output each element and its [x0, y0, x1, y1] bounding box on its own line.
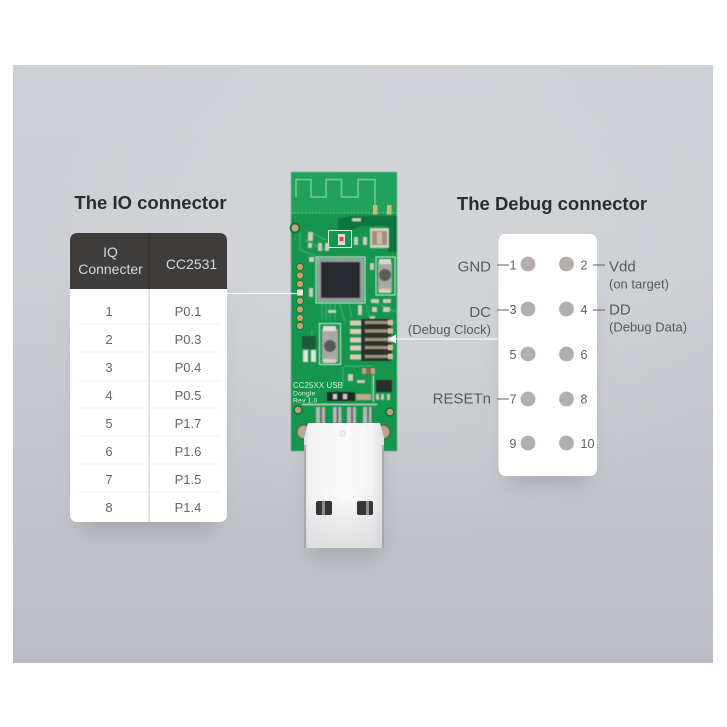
PCB silkscreen label: CC25XX USB: [293, 381, 343, 390]
table rows: P0.5: [175, 388, 201, 403]
pin labels: DD: [609, 302, 631, 318]
pin labels: [408, 258, 687, 408]
pin numbers: 2: [581, 258, 588, 272]
background panel: [13, 65, 713, 663]
arrow: table to IO pad: [227, 292, 298, 294]
small components: [308, 218, 391, 383]
pin labels: DC: [469, 304, 491, 321]
pin numbers: 1: [510, 258, 517, 272]
regulator chip: [373, 375, 392, 402]
pin labels: RESETn: [433, 390, 491, 408]
heading: The IO connector: The IO connector: [74, 192, 227, 213]
bottom push button S2: [320, 324, 340, 364]
table rows: 1: [105, 304, 113, 319]
table rows: P1.7: [175, 416, 201, 431]
pin labels: (Debug Data): [609, 320, 687, 334]
pin numbers: 3: [510, 303, 517, 317]
table header labels: IQ: [103, 244, 118, 260]
PCB antenna trace: [296, 180, 375, 206]
pin labels: GND: [458, 258, 491, 276]
table rows: 6: [105, 444, 113, 459]
crystal: [370, 228, 389, 248]
pin numbers: 10: [581, 437, 594, 451]
arrow: debug panel to header: [388, 334, 498, 344]
table rows: P1.4: [175, 500, 201, 515]
pin dots: [521, 257, 574, 450]
PCB silkscreen label: Rev 1.0: [293, 398, 318, 404]
CC2531 USB dongle: [290, 172, 397, 548]
pin numbers: 7: [510, 392, 517, 406]
pin labels: (Debug Clock): [408, 322, 491, 337]
table rows: 7: [105, 472, 113, 487]
pin leader lines: [497, 265, 605, 399]
lower mounting holes: [294, 406, 394, 416]
table rows: 2: [105, 332, 113, 347]
table header labels: Connecter: [78, 261, 143, 277]
debug header pins: [350, 319, 393, 361]
pin numbers: 5: [510, 348, 517, 362]
lower-left LEDs: [302, 336, 316, 362]
IO connector pads: [296, 264, 304, 330]
USB shell flanges: [297, 425, 390, 439]
heading: The Debug connector: The Debug connector: [457, 193, 647, 214]
table rows: P1.5: [175, 472, 201, 487]
table rows: P1.6: [175, 444, 201, 459]
PCB silkscreen label: [293, 381, 343, 404]
pin numbers: 6: [581, 348, 588, 362]
PCB board: [291, 172, 397, 451]
pin numbers: 8: [581, 392, 588, 406]
table rows: [105, 304, 201, 515]
table rows: 5: [105, 416, 113, 431]
LED P1: [328, 230, 352, 248]
table rows: P0.3: [175, 332, 201, 347]
panel: debug connector pins: [497, 234, 605, 476]
USB holes: [316, 501, 373, 515]
table rows: 4: [105, 388, 113, 403]
table rows: P0.4: [175, 360, 201, 375]
table rows: P0.1: [175, 304, 201, 319]
top push button: [376, 257, 395, 295]
resistor: [362, 368, 375, 374]
PCB silkscreen label: Dongle: [293, 390, 316, 398]
pin labels: Vdd: [609, 258, 636, 276]
pin numbers: 4: [581, 303, 588, 317]
table header labels: CC2531: [166, 256, 217, 272]
mounting hole top: [290, 224, 300, 232]
pin numbers: 9: [510, 437, 517, 451]
USB contact pads: [316, 407, 372, 423]
table header labels: [78, 244, 217, 277]
table rows: 3: [105, 360, 113, 375]
USB plug: [304, 423, 384, 548]
CC2531 chip: [316, 257, 365, 303]
table rows: 8: [105, 500, 113, 515]
dark SMD cluster: [327, 392, 371, 401]
table: IO connector pin map: [70, 233, 227, 522]
soft shadows: [80, 300, 589, 558]
pin labels: (on target): [609, 276, 669, 292]
antenna pads: [373, 205, 392, 214]
pin numbers: [510, 258, 594, 451]
